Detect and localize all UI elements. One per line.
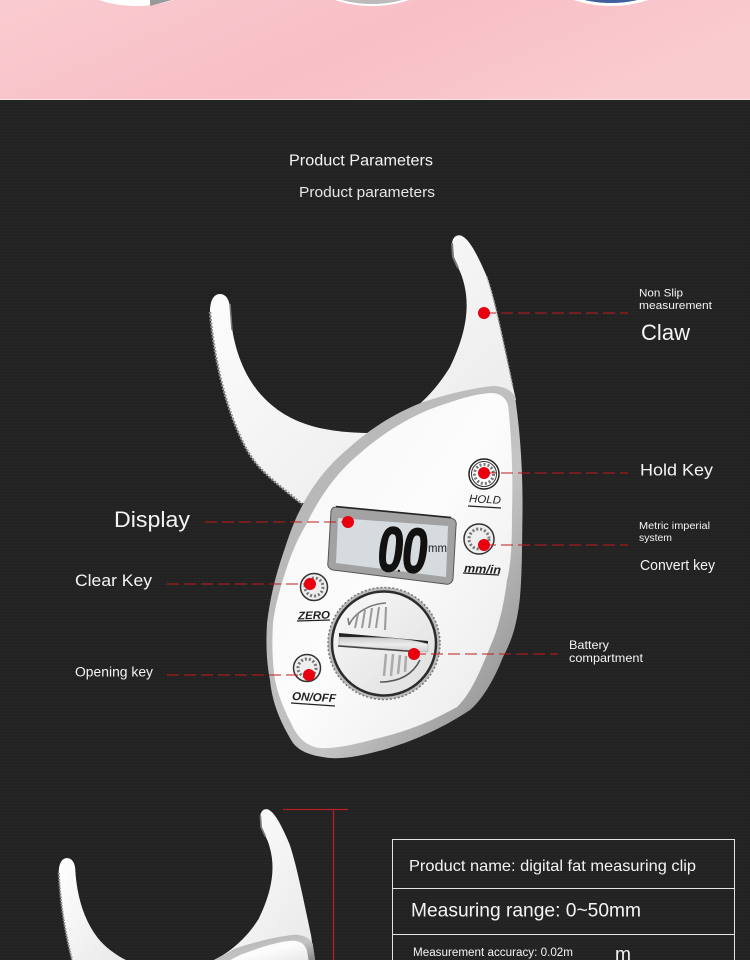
measurement accuracy row: Measurement accuracy: 0.02m (413, 947, 573, 959)
height dimension line (283, 809, 348, 960)
callout: battery compartment: Battery (569, 638, 609, 652)
silver product disc (335, 0, 409, 6)
zero button (297, 574, 331, 623)
callout: convert key: Metric imperial (639, 520, 710, 532)
caliper body rim (266, 386, 523, 758)
lower caliper illustration (59, 809, 315, 960)
callout: battery compartment (408, 638, 644, 665)
reading: 0 (374, 513, 408, 586)
callout: claw: measurement (639, 300, 712, 312)
callout: display: Display (114, 507, 190, 532)
callout: claw: Claw (641, 320, 690, 345)
blue product disc (574, 0, 648, 6)
battery dial (328, 588, 440, 700)
on/off button (291, 654, 337, 706)
specification table (392, 840, 734, 960)
callout: clear key: Clear Key (75, 571, 153, 590)
pink top banner (0, 0, 750, 99)
mm/in button: mm/in (464, 561, 501, 577)
reading: . (396, 559, 402, 575)
callout: clear key (75, 571, 316, 590)
mm/in button (463, 524, 501, 577)
caliper body face (272, 393, 512, 748)
callout: convert key (478, 520, 716, 574)
callout: battery compartment: compartment (569, 651, 644, 665)
on/off button: ON/OFF (292, 691, 337, 705)
product name row: Product name: digital fat measuring clip (409, 858, 696, 875)
callout: opening key: Opening key (75, 664, 153, 680)
reading: 0 (398, 514, 433, 587)
white product disc (99, 0, 173, 6)
callout: display (114, 507, 354, 532)
callout: opening key (75, 664, 315, 681)
callout: claw: Non Slip (639, 288, 683, 300)
claw jaw (210, 235, 516, 504)
hold button (468, 459, 501, 508)
callout: hold key (478, 460, 714, 480)
caliper product illustration (210, 235, 523, 758)
callout: convert key: Convert key (640, 558, 716, 574)
LCD display (328, 506, 456, 587)
callout: claw (478, 288, 712, 345)
callout: hold key: Hold Key (640, 460, 714, 480)
hold button: HOLD (469, 493, 501, 507)
measuring range row: Measuring range: 0~50mm (411, 900, 641, 922)
callout: convert key: system (639, 532, 672, 544)
unit: mm (428, 541, 447, 555)
zero button: ZERO (297, 609, 331, 623)
subheading: Product parameters (299, 184, 435, 201)
heading: Product Parameters (289, 152, 433, 170)
